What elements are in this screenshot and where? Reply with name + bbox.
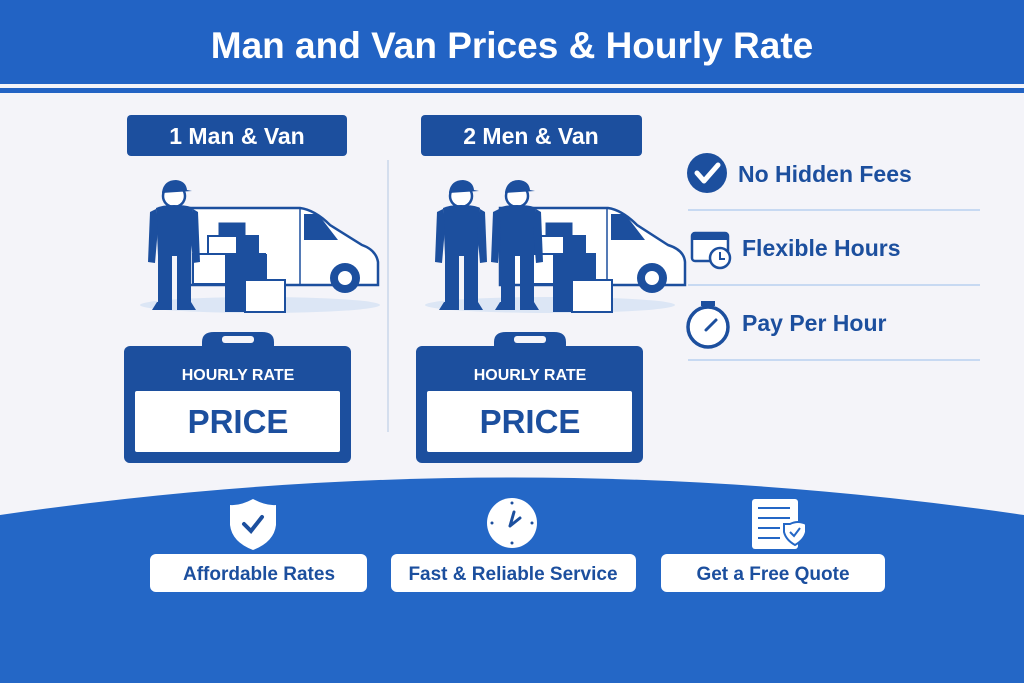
button: get a free quote — [661, 554, 885, 592]
icon: shield — [230, 499, 276, 550]
label: 1 Man & Van: 1 Man & Van — [169, 123, 305, 149]
price card 2 — [416, 332, 643, 463]
label: 2 Men & Van — [421, 115, 642, 156]
label: 2 Men & Van: 2 Men & Van — [463, 123, 599, 149]
button: affordable rates — [150, 554, 367, 592]
button: affordable rates: Affordable Rates — [183, 564, 335, 585]
title: Man and Van Prices & Hourly Rate — [211, 25, 813, 66]
icon: quote document — [752, 499, 806, 549]
icon: stopwatch — [688, 301, 728, 347]
features list: Pay Per Hour — [742, 310, 886, 336]
features list: No Hidden Fees — [738, 161, 912, 187]
illustration: 1 man and van — [140, 180, 380, 313]
bottom wave panel — [0, 478, 1024, 683]
label: 1 Man & Van — [127, 115, 347, 156]
price card 2: PRICE — [480, 403, 580, 440]
icon: calendar clock — [692, 233, 730, 268]
price card 1: HOURLY RATE — [182, 367, 295, 384]
price card 2: HOURLY RATE — [474, 367, 587, 384]
price card 1: PRICE — [188, 403, 288, 440]
header — [0, 0, 1024, 93]
icon: clock — [487, 498, 537, 548]
illustration: 2 men and van — [425, 180, 685, 313]
icon: check circle — [687, 153, 727, 193]
features list: Flexible Hours — [742, 235, 900, 261]
features list — [687, 153, 980, 360]
price card 1 — [124, 332, 351, 463]
button: fast & reliable service — [391, 554, 636, 592]
button: fast & reliable service: Fast & Reliable Service — [408, 564, 618, 585]
button: get a free quote: Get a Free Quote — [696, 564, 850, 585]
